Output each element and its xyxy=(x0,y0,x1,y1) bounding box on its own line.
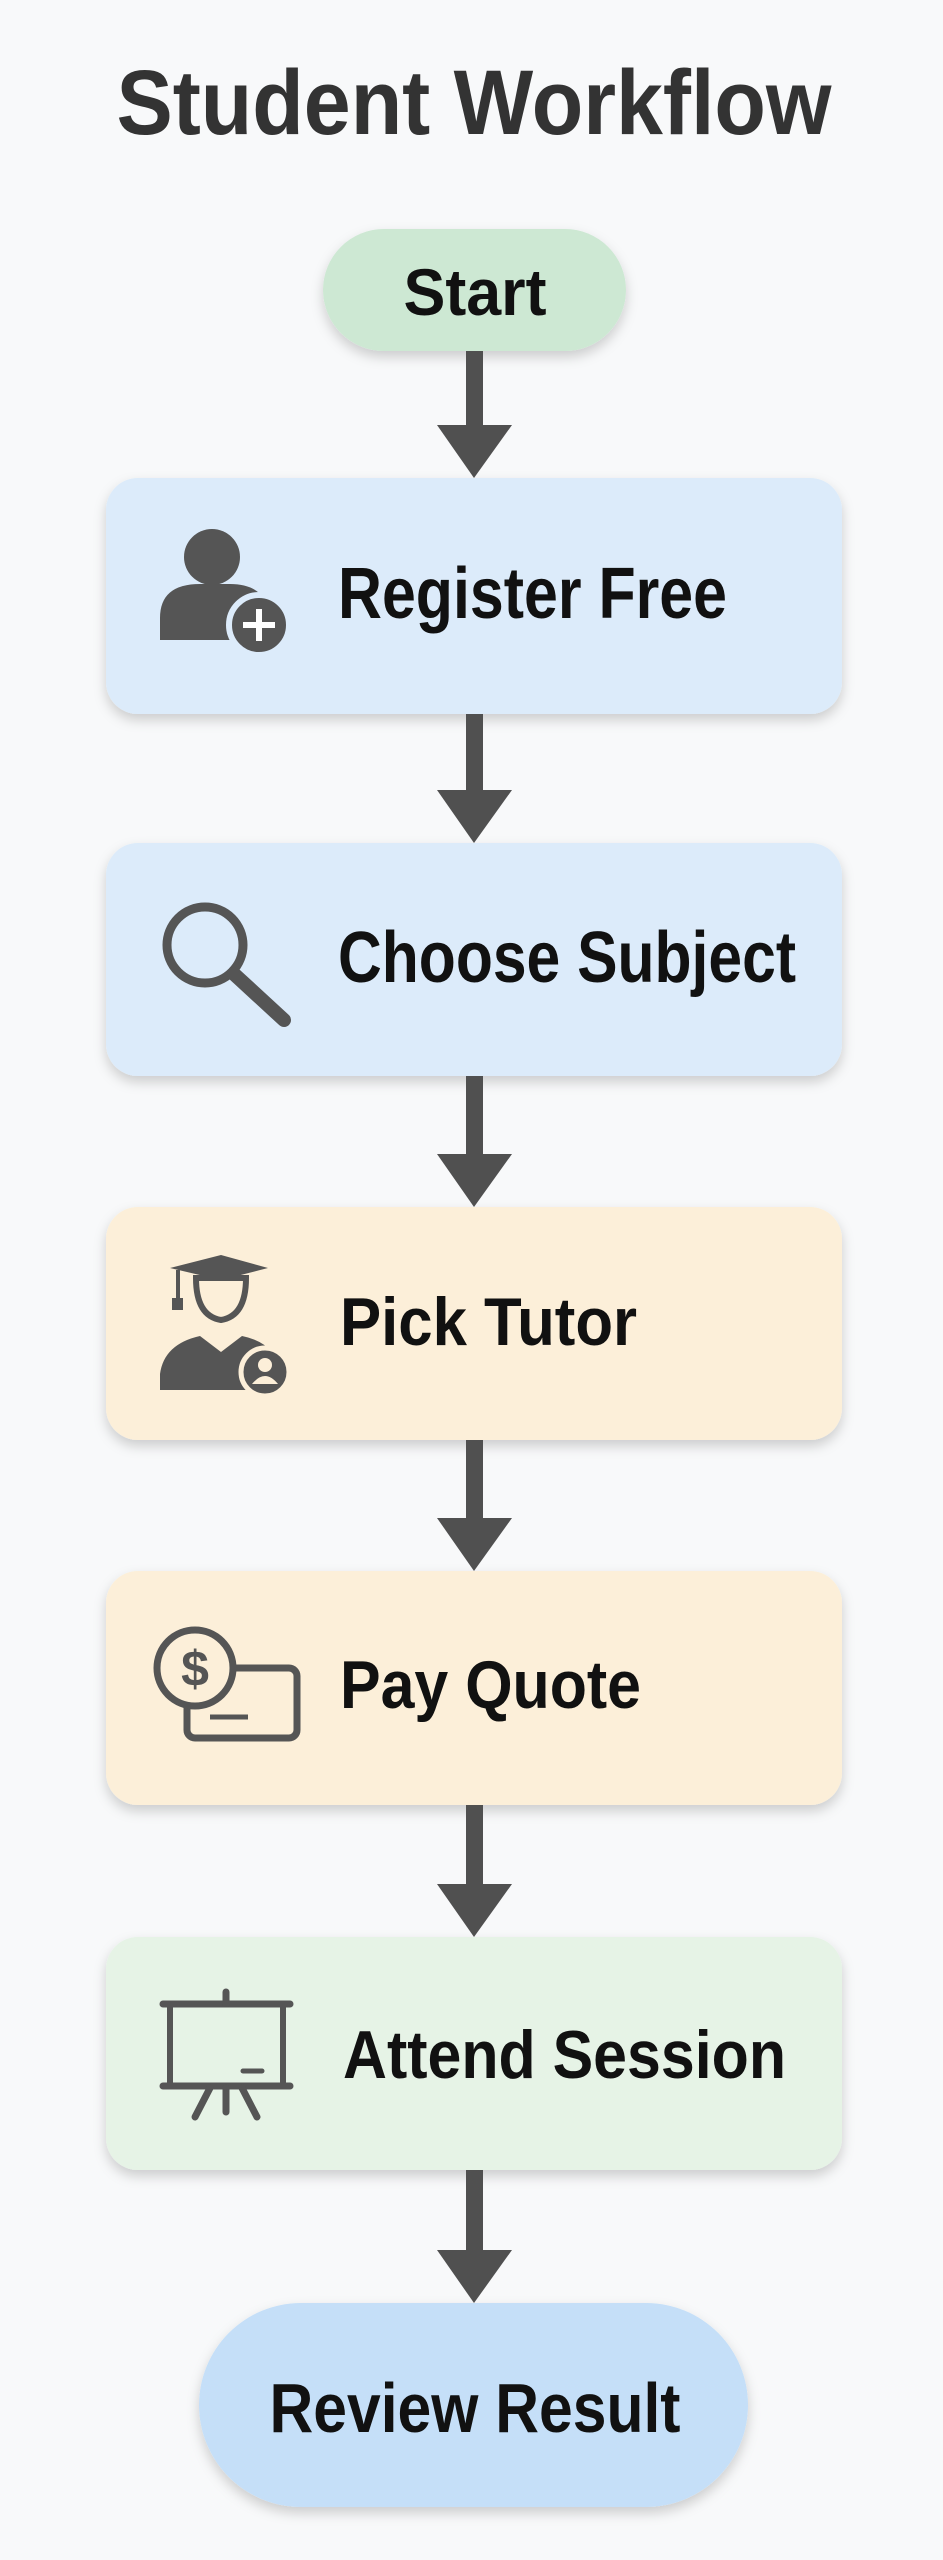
arrow: attend to review xyxy=(437,2170,512,2303)
end pill: review result xyxy=(199,2303,748,2507)
icon: coin and card xyxy=(157,1630,297,1738)
panel: pay quote xyxy=(106,1571,842,1805)
arrow: register to choose xyxy=(437,714,512,843)
arrow: choose to pick xyxy=(437,1076,512,1207)
icon: presentation board xyxy=(163,1992,290,2117)
panel: choose subject: Choose Subject xyxy=(338,918,796,998)
panel: attend session xyxy=(106,1937,842,2170)
title: Student Workflow xyxy=(116,52,832,154)
arrow: start to register xyxy=(437,351,512,478)
panel: register free: Register Free xyxy=(338,554,727,634)
start pill: Start xyxy=(404,255,547,329)
icon: user add xyxy=(160,529,289,655)
start pill xyxy=(323,229,626,351)
arrow: pay to attend xyxy=(437,1805,512,1937)
arrow: pick to pay xyxy=(437,1440,512,1571)
panel: pick tutor xyxy=(106,1207,842,1440)
panel: pick tutor: Pick Tutor xyxy=(340,1284,637,1360)
icon: magnifier xyxy=(167,907,284,1020)
panel: attend session: Attend Session xyxy=(343,2017,786,2093)
panel: choose subject xyxy=(106,843,842,1076)
panel: register free xyxy=(106,478,842,714)
icon: coin and card: $ xyxy=(181,1641,209,1697)
panel: pay quote: Pay Quote xyxy=(340,1647,641,1723)
icon: graduate tutor xyxy=(160,1255,289,1396)
end pill: review result: Review Result xyxy=(270,2369,680,2447)
